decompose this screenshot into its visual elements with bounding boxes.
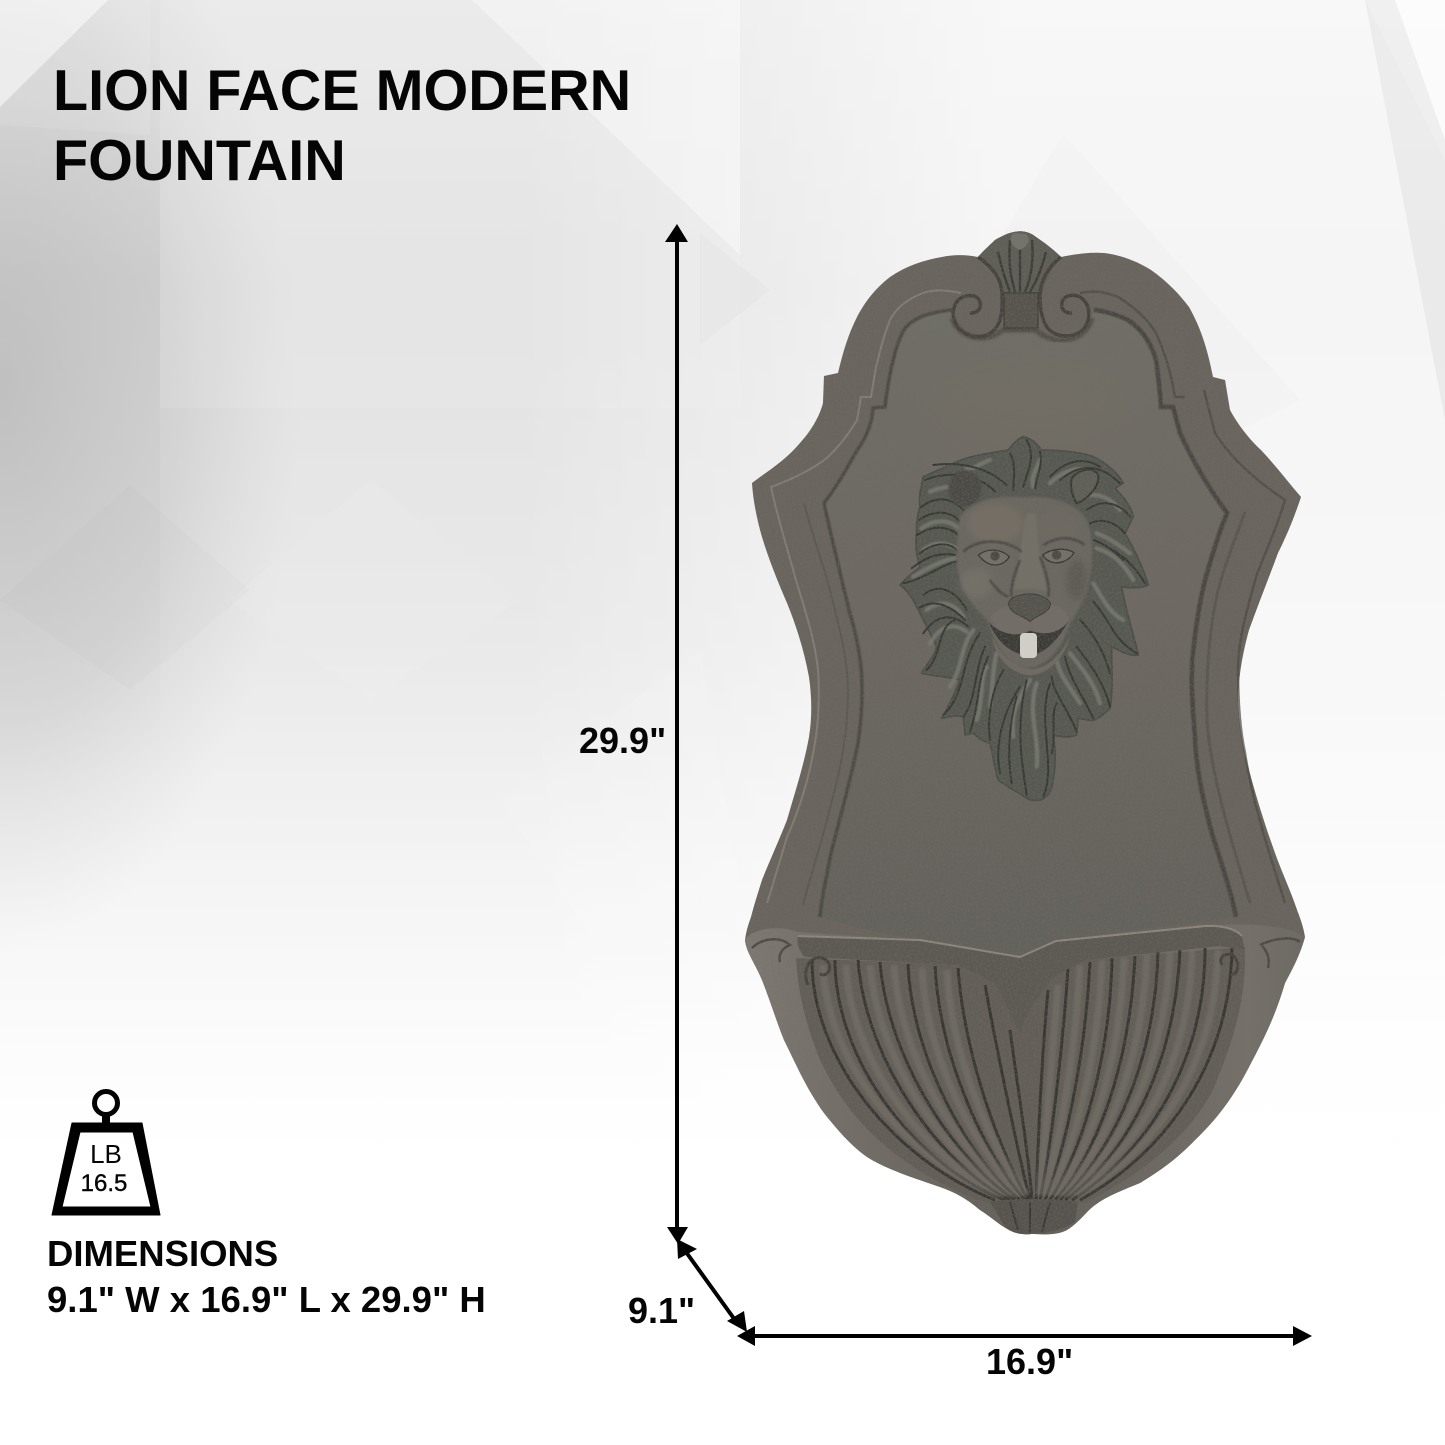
crest: left scroll [953,257,1002,337]
lion: mouth [988,620,1069,656]
basin: rim band [797,927,1245,1033]
basin: flute lines [812,948,1232,1200]
depth label: 9.1" [628,1290,695,1331]
height arrow [665,224,688,1244]
lion: face [957,497,1092,668]
fountain: lion head relief [900,437,1148,800]
lion: mane [900,437,1148,800]
fountain: frame grooves [767,290,1285,905]
crest: scroll shadow [952,318,1092,340]
fountain: stone grain texture [745,231,1305,1234]
fountain: backplate silhouette [745,231,1305,1234]
icon: weight: LB [90,1139,122,1169]
icon: weight [52,1092,160,1215]
fountain: basin [745,924,1305,1234]
fountain: crest scrolls and palmette [952,231,1092,340]
crest: right scroll [1040,257,1089,336]
lion: mane light strands [913,460,1133,767]
icon: weight: 16.5 [81,1170,127,1197]
basin: right scroll [1221,954,1238,975]
lion: ears [948,470,982,507]
title: FOUNTAIN [53,129,346,193]
title [53,59,631,193]
lion: eyes [978,550,1009,565]
fountain: panel edge shadow [820,310,952,917]
lion: brow and muzzle shading [963,538,1085,597]
depth arrow [677,1239,747,1332]
basin: bottom finial [990,1199,1078,1234]
lion: muzzle [990,605,1069,637]
dimensions text [47,1233,486,1320]
dimensions text: 9.1" W x 16.9" L x 29.9" H [47,1279,486,1320]
basin: left scroll [806,958,830,985]
basin: fluted bowl [796,947,1245,1203]
height label: 29.9" [579,720,666,761]
lion: nose [1008,594,1051,622]
basin: shell [745,924,1305,1234]
lion: water spout [1020,633,1037,658]
width arrow [737,1326,1312,1346]
width label: 16.9" [986,1341,1073,1382]
lion: mane dark strands [903,440,1145,797]
title: LION FACE MODERN [53,59,631,123]
dimensions text: DIMENSIONS [47,1233,278,1274]
fountain illustration [745,231,1305,1234]
fountain: recessed panel [820,310,1236,958]
